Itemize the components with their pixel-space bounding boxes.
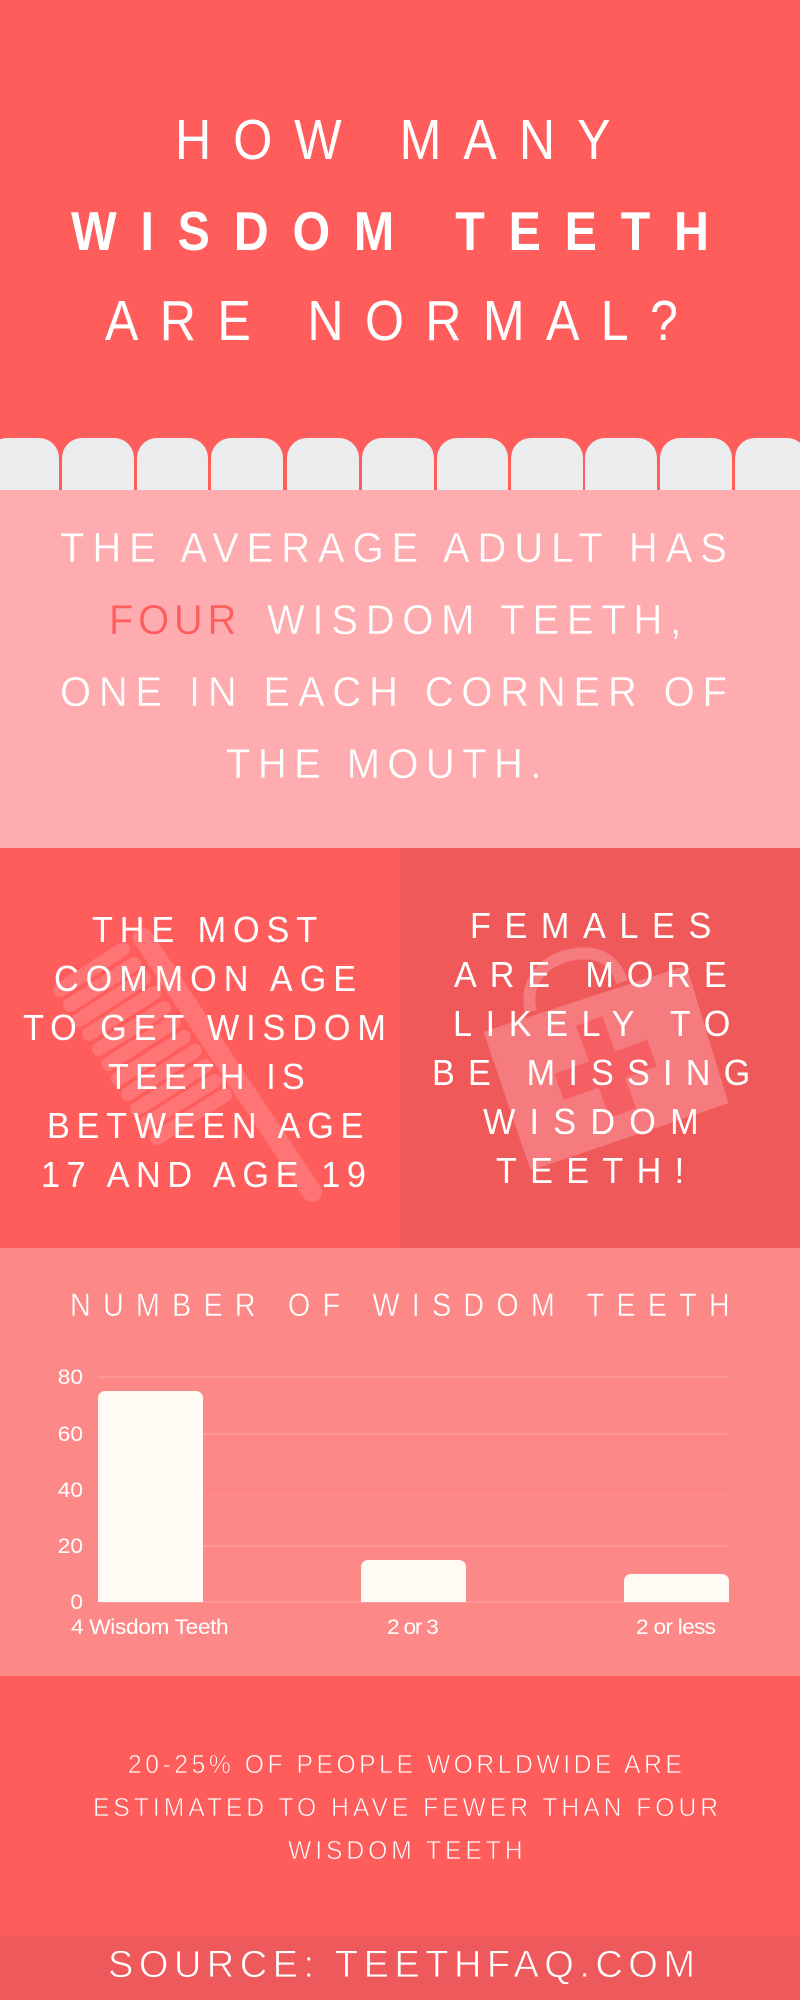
text: worldwide statistic: 20-25% OF PEOPLE WORLDWIDE ARE [128, 1750, 682, 1779]
bar chart: 0 [70, 1590, 83, 1614]
text: most common age: 17 AND AGE 19 [41, 1155, 366, 1195]
icon: toothbrush [60, 938, 312, 1192]
text: average adult statement: ONE IN EACH CORNER OF [60, 668, 727, 715]
title: ARE NORMAL? [105, 289, 678, 353]
panel: worldwide statistic [0, 1676, 800, 1936]
text: females missing wisdom teeth: BE MISSING [432, 1053, 750, 1093]
panel: average adult [0, 490, 800, 848]
title: WISDOM TEETH [71, 200, 709, 262]
text: most common age: TEETH IS [108, 1057, 305, 1097]
text: average adult statement: THE AVERAGE ADULT HAS [60, 524, 727, 571]
text: most common age: TO GET WISDOM [23, 1008, 386, 1048]
text: most common age: COMMON AGE [54, 959, 356, 999]
text: most common age: THE MOST [92, 910, 317, 950]
text: most common age: BETWEEN AGE [47, 1106, 363, 1146]
title: HOW MANY [175, 108, 611, 172]
bar chart: 4 Wisdom Teeth [71, 1615, 229, 1639]
text: worldwide statistic [93, 1750, 718, 1865]
panel: chart [0, 1248, 800, 1676]
text: average adult statement: THE MOUTH. [226, 740, 541, 787]
text: average adult statement [60, 524, 727, 787]
text: females missing wisdom teeth [432, 906, 750, 1191]
panel: header background [0, 0, 800, 490]
chart heading: NUMBER OF WISDOM TEETH [70, 1288, 730, 1323]
bar chart: 60 [58, 1422, 83, 1446]
teeth row [0, 438, 800, 490]
bar chart: 20 [58, 1534, 83, 1558]
bar chart: 2 or less [636, 1615, 716, 1639]
bar chart [58, 1365, 729, 1639]
text: worldwide statistic: ESTIMATED TO HAVE FEWER THAN FOUR [93, 1793, 718, 1822]
panel: females [400, 848, 800, 1248]
icon: first aid bag [486, 953, 726, 1168]
text: females missing wisdom teeth: WISDOM [483, 1102, 699, 1142]
text: source: SOURCE: TEETHFAQ.COM [108, 1944, 695, 1986]
text: worldwide statistic: WISDOM TEETH [288, 1836, 523, 1865]
text: most common age [23, 910, 386, 1195]
text: females missing wisdom teeth: LIKELY TO [453, 1004, 730, 1044]
text: females missing wisdom teeth: ARE MORE [454, 955, 727, 995]
title [71, 108, 709, 353]
bar chart: 2 or 3 [387, 1615, 439, 1639]
text: average adult statement: FOUR [109, 596, 236, 643]
bar chart: 80 [58, 1365, 83, 1389]
bar chart: 40 [58, 1478, 83, 1502]
text: females missing wisdom teeth: TEETH! [496, 1151, 684, 1191]
panel: source footer [0, 1936, 800, 2000]
panel: most common age [0, 848, 400, 1248]
text: average adult statement: WISDOM TEETH, [267, 596, 681, 643]
text: females missing wisdom teeth: FEMALES [470, 906, 711, 946]
